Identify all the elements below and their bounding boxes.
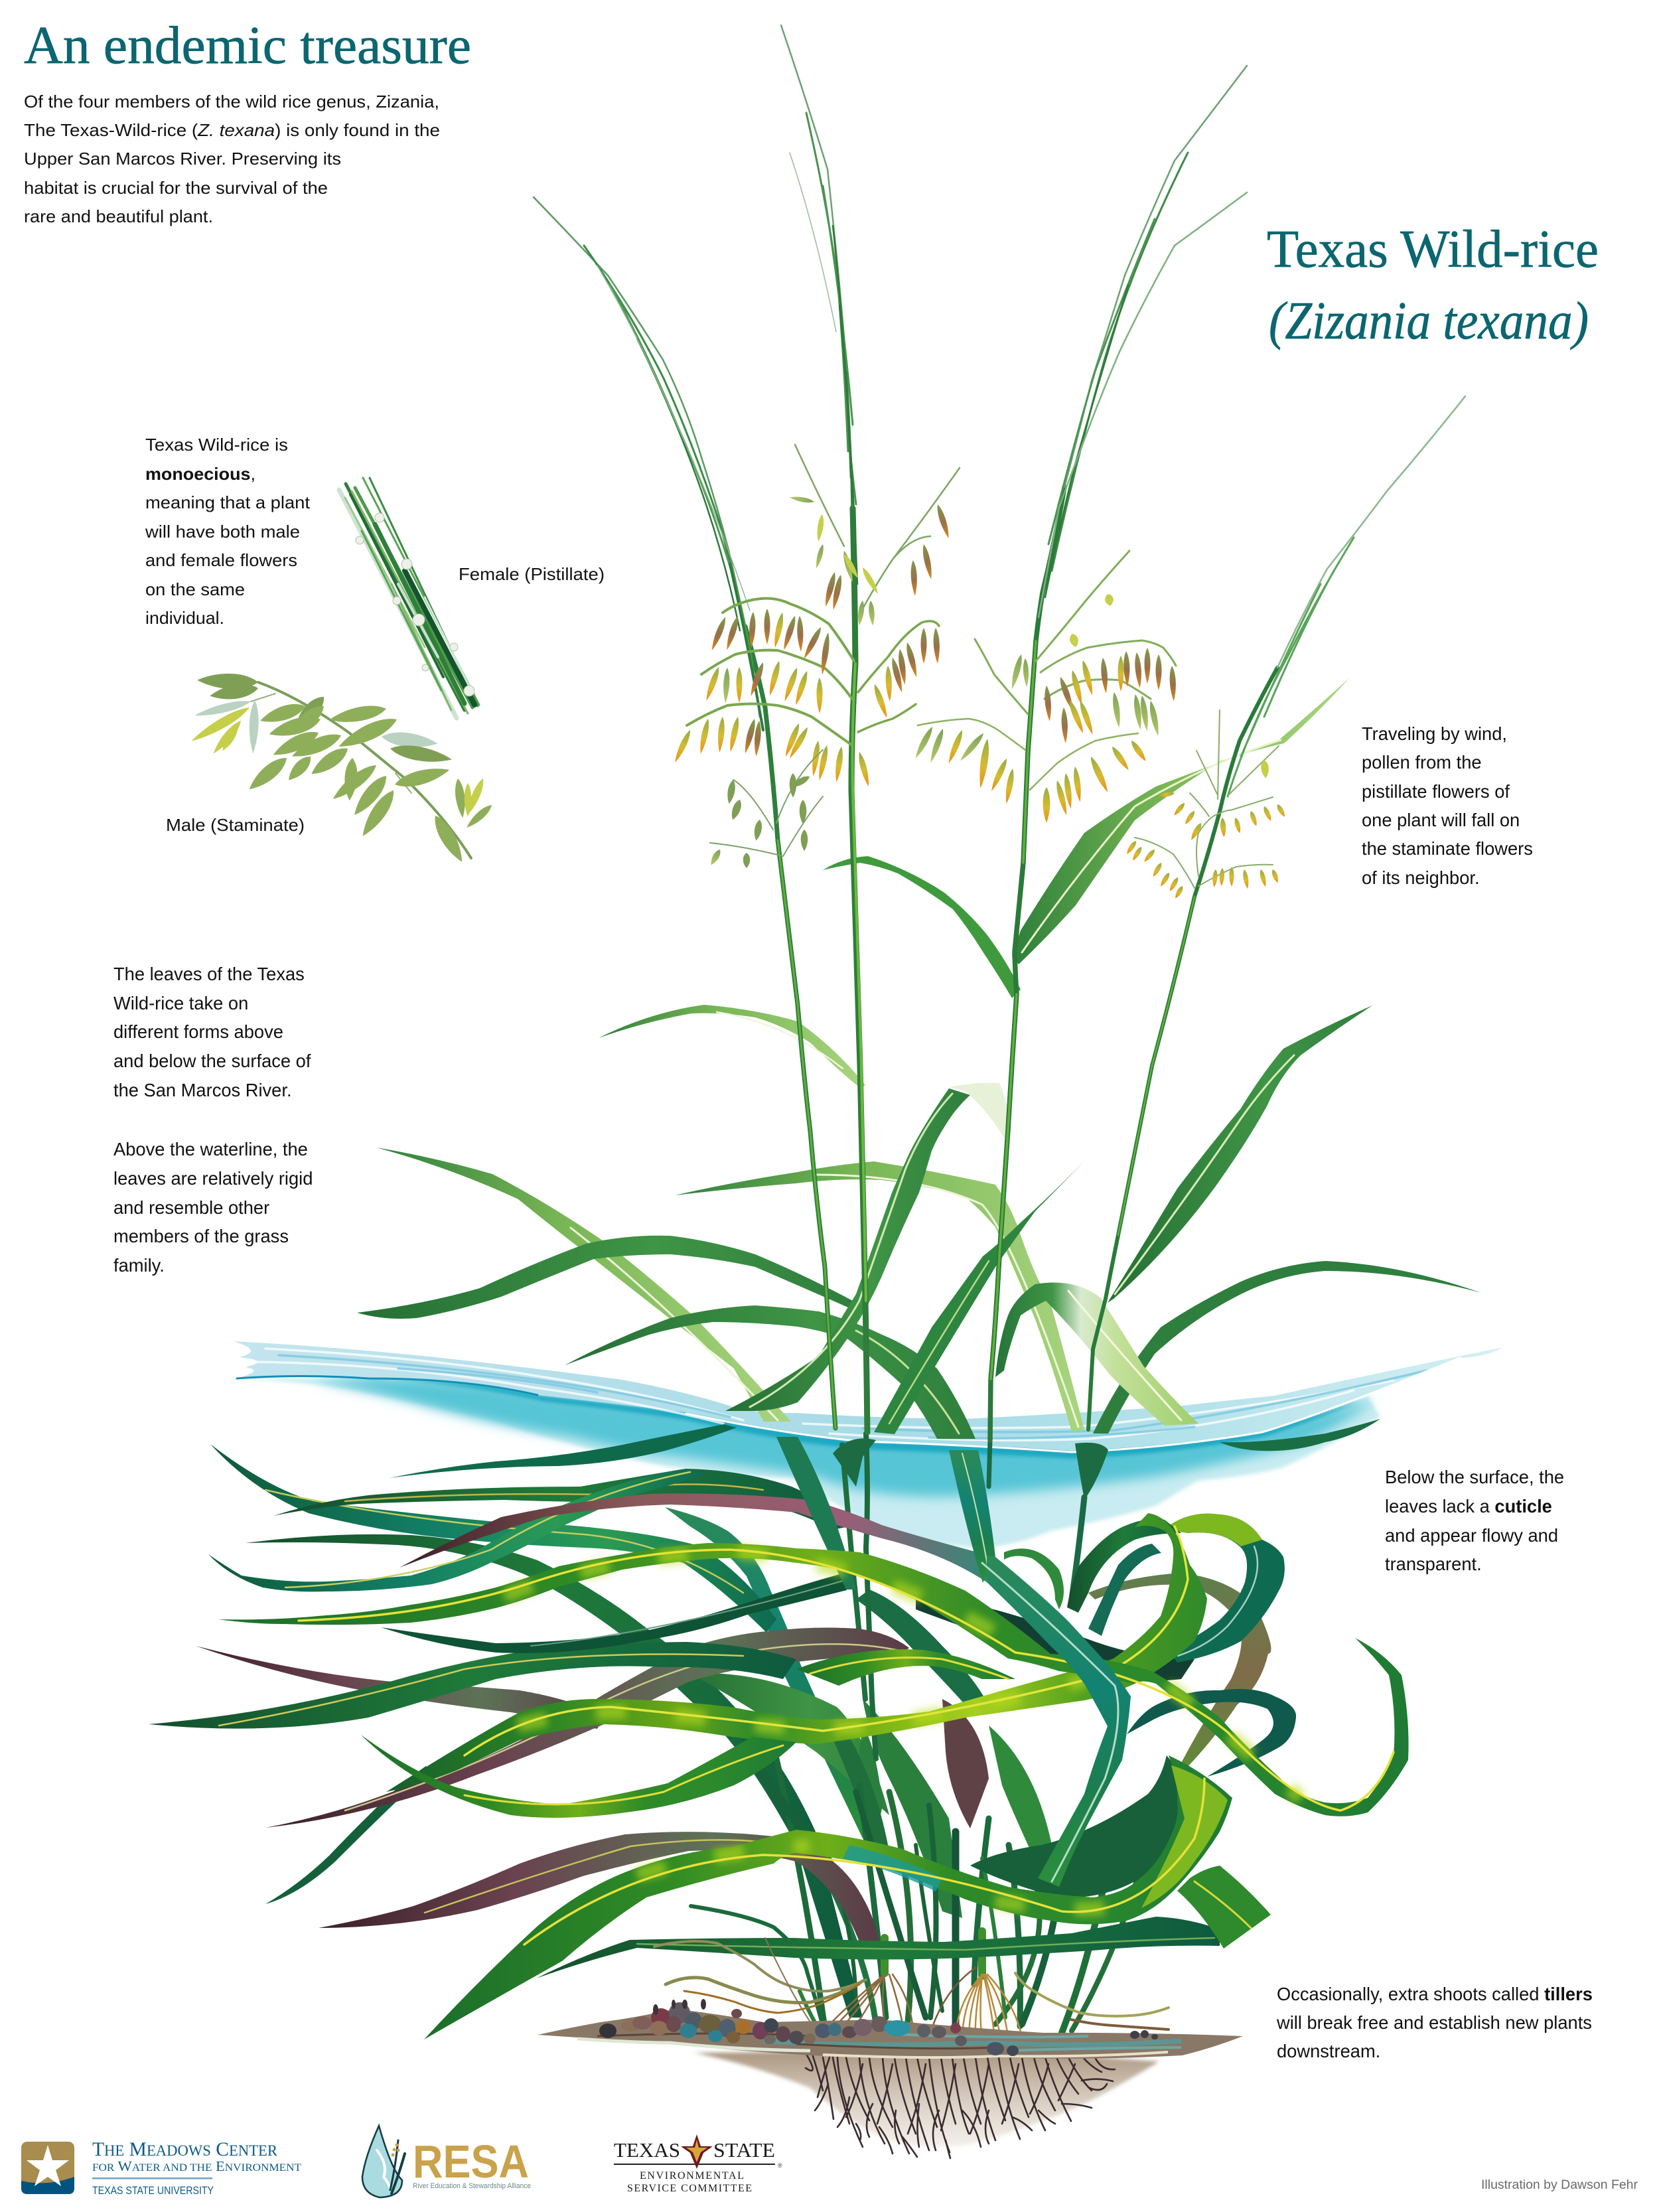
leaf: submerged dark leaf crossing the water body [390, 1424, 737, 1478]
logo: RESA: River Education & Stewardship Alliance [413, 2182, 531, 2190]
wind pollination text: pistillate flowers of [1362, 781, 1510, 802]
illustration: female pistillate flower inset [339, 478, 479, 718]
leaf: lower purple-green blade [319, 1832, 879, 1951]
tillers text: will break free and establish new plants [1276, 2012, 1592, 2033]
panicle: stem B right arcs and upper branch [789, 445, 960, 732]
leaf: thin blade through stems [874, 1159, 1086, 1434]
monoecious text block [145, 435, 311, 628]
leaf: small green blade [989, 1726, 1052, 1875]
monoecious text block: monoecious, [145, 464, 255, 484]
leaf: far-back descending blade [246, 1534, 863, 2018]
leaves text block: The leaves of the Texas [113, 964, 305, 984]
monoecious text block: on the same [145, 579, 245, 599]
leaf: upper small blade [599, 1005, 865, 1088]
logo: The Meadows Center: FOR WATER AND THE ENVIRONMENT [92, 2158, 301, 2174]
intro text block: Upper San Marcos River. Preserving its [24, 149, 341, 169]
stem D [1088, 668, 1277, 1430]
cuticle text [1385, 1467, 1564, 1574]
leaf: rust centre blade [942, 1699, 989, 1828]
leaf: dark arcing blade [357, 1236, 853, 1319]
cuticle text: transparent. [1385, 1554, 1482, 1574]
intro text block: Of the four members of the wild rice genus, Zizania, [24, 92, 439, 111]
ground: river bed with gravel [538, 1999, 1243, 2059]
wind pollination text: pollen from the [1362, 752, 1482, 773]
logo: Texas State Environmental Service Committee: ENVIRONMENTAL [640, 2170, 744, 2181]
wind pollination text: Traveling by wind, [1362, 723, 1507, 744]
title: An endemic treasure: An endemic treasure [24, 17, 471, 75]
label: female: Female (Pistillate) [459, 564, 605, 584]
monoecious text block: and female flowers [145, 550, 297, 570]
leaf: olive tipped blade [273, 1469, 849, 1530]
panicle: stem C upper arcs [975, 551, 1177, 743]
monoecious text block: will have both male [145, 522, 300, 542]
leaf: thin long dark blade [265, 1766, 430, 1904]
logo: Texas State Environmental Service Committee: SERVICE COMMITTEE [627, 2183, 752, 2194]
logo: Texas State Environmental Service Committee: TEXAS [614, 2138, 680, 2162]
species title: Texas Wild-rice (Zizania texana): Texas Wild-rice [1267, 220, 1599, 279]
leaf: purple lower back blade [196, 1646, 604, 1729]
above-water leaves [357, 678, 1481, 1439]
leaf: big foreground bright leaf with folded end [424, 1755, 1232, 2039]
leaf: tall right blade L4 [1108, 1005, 1372, 1303]
intro text block [24, 92, 440, 226]
species title: Texas Wild-rice (Zizania texana): (Zizania texana) [1269, 292, 1589, 350]
label: male: Male (Staminate) [166, 815, 305, 835]
leaves text block: different forms above [113, 1021, 283, 1042]
leaves text block: and resemble other [113, 1197, 269, 1218]
leaf: curly brown back leaf [1088, 1573, 1271, 1769]
panicle: stem C lower arcs [913, 719, 1148, 823]
leaf: teal blade crossing in front of the bright leaves [982, 1556, 1131, 1887]
panicle: lower green branch on stem A [709, 750, 823, 868]
logo: RESA: RESA [413, 2136, 529, 2187]
leaf: dark green blade over base [536, 1917, 1220, 1978]
wind pollination text: one plant will fall on [1362, 810, 1520, 830]
cuticle text: and appear flowy and [1385, 1525, 1558, 1546]
leaf: dark fold behind the big foreground leaf [970, 1755, 1181, 1898]
logo: Texas State Environmental Service Committee [614, 2134, 782, 2194]
stem A [745, 627, 835, 1428]
leaf: wide mid green pointed blade [690, 1673, 889, 1815]
leaf: teal wide blade from lower-left tip [208, 1469, 707, 1591]
leaf: dark strap [381, 1572, 847, 1653]
tillers text: Occasionally, extra shoots called tillers [1277, 1984, 1593, 2004]
cuticle text: leaves lack a cuticle [1385, 1496, 1552, 1516]
leaves text block: family. [113, 1255, 165, 1276]
leaf: bright curl upper [386, 1513, 1207, 1792]
intro text block: The Texas-Wild-rice ( Z. texana ) is only found in the [24, 120, 440, 140]
monoecious text block: Texas Wild-rice is [145, 435, 288, 455]
leaf: long light blade from left [376, 1147, 791, 1422]
leaf: mid stem leaf long [1012, 678, 1349, 964]
leaves text block [113, 964, 313, 1276]
leaf: purple long blade [265, 1628, 909, 1828]
leaves text block: Wild-rice take on [113, 993, 248, 1013]
panicle: stem D [1125, 710, 1287, 900]
logo: The Meadows Center: TEXAS STATE UNIVERSITY [92, 2184, 214, 2197]
leaves text block: and below the surface of [113, 1051, 311, 1071]
logo: RESA [362, 2126, 531, 2197]
leaf: dark back loop [1127, 1689, 1296, 1777]
leaf: folded tip lower right [1177, 1866, 1271, 1949]
leaves text block: the San Marcos River. [113, 1080, 292, 1100]
leaves text block: Above the waterline, the [113, 1139, 308, 1159]
tillers text: downstream. [1277, 2041, 1380, 2061]
intro text block: rare and beautiful plant. [24, 206, 213, 226]
wind pollination text [1362, 723, 1533, 888]
underwater leaves: back layer [196, 1444, 1296, 2018]
leaves text block: members of the grass [113, 1226, 289, 1246]
leaf: lower-left wide dark tip blade [149, 1642, 796, 1729]
leaf: bright thin-tip leaf [361, 1649, 1015, 1818]
leaf: blades dipping below the surface [776, 1437, 1108, 1589]
leaf: thin stem leaf to left [823, 856, 1021, 998]
monoecious text block: meaning that a plant [145, 492, 311, 512]
bulbs and basal root fans [654, 1938, 1169, 2044]
roots: soil under the gravel with root mass [694, 2051, 1159, 2158]
logo: The Meadows Center: THE MEADOWS CENTER [92, 2138, 278, 2160]
leaf: dark centre-right strap [916, 1591, 1194, 1680]
leaf: wide long light blade [675, 1161, 1084, 1432]
leaf: arch with pale fold [725, 1088, 970, 1411]
leaf: dark teal blade going down [856, 1589, 989, 1709]
leaf: submerged leaf tip on the right [1220, 1419, 1380, 1451]
leaf: purple-teal upper blade [399, 1493, 995, 1582]
logo: The Meadows Center [21, 2138, 301, 2197]
wind pollination text: of its neighbor. [1362, 867, 1480, 888]
leaf: arching blade [665, 1507, 876, 1838]
species title: Texas Wild-rice (Zizania texana) [1267, 220, 1599, 350]
leaf: upper arch and dark loop right [1067, 1514, 1285, 1662]
tillers text [1276, 1984, 1593, 2061]
leaf: pale arch front [995, 1283, 1198, 1426]
wind pollination text: the staminate flowers [1362, 838, 1533, 859]
leaf: upper-left tapered blade [210, 1444, 776, 1633]
leaves text block: leaves are relatively rigid [113, 1168, 313, 1189]
credit: Illustration by Dawson Fehr [1481, 2178, 1638, 2192]
leaf: long blade to the water [565, 1305, 975, 1439]
leaf: long bright yellow-green blade with loop to the right [218, 1543, 1409, 1816]
leaf: small arch [1004, 1548, 1064, 1609]
stem C [990, 487, 1064, 1440]
logo: Texas State Environmental Service Committee: STATE [713, 2138, 775, 2162]
intro text block: habitat is crucial for the survival of the [24, 178, 328, 198]
logo: Texas State Environmental Service Committee: ® [778, 2162, 782, 2169]
leaf: right blade L10 [1093, 1261, 1481, 1434]
panicle: stem B left arcs [672, 599, 871, 787]
monoecious text block: individual. [145, 608, 224, 628]
stems above the water [534, 25, 1465, 1440]
cuticle text: Below the surface, the [1385, 1467, 1564, 1487]
leaf: wide blade right of centre [863, 1699, 962, 1918]
stem B [851, 508, 867, 1432]
stems in the water and basal shoots [691, 1434, 1141, 2050]
water: river surface and body [233, 1341, 1503, 1548]
illustration: male staminate flower inset [189, 672, 494, 865]
